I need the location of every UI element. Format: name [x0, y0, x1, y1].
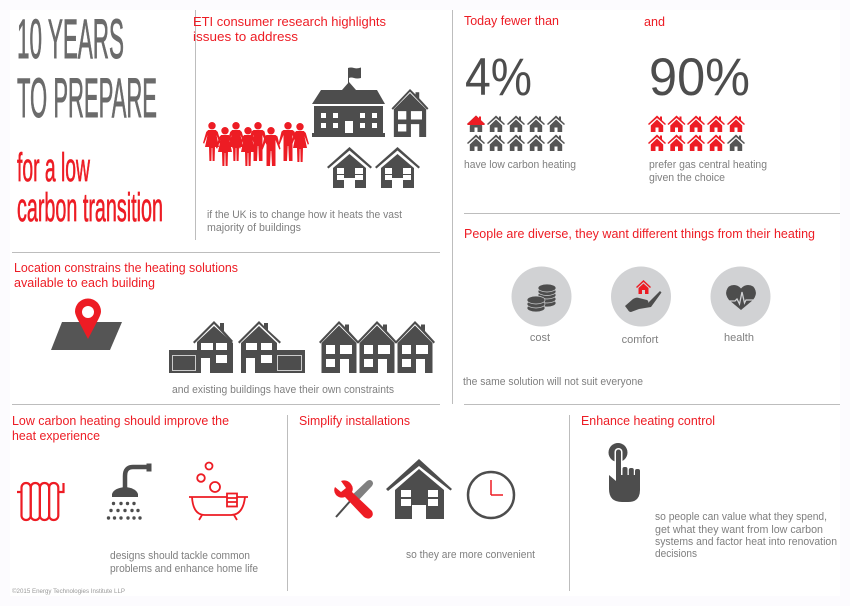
text: buildings note	[207, 209, 402, 234]
heading: enhance heating control: Enhance heating control	[581, 413, 715, 428]
heading: consumer research: ETI consumer research highlights	[193, 14, 386, 29]
text: designs should tackle: problems and enhance home life	[110, 563, 258, 575]
heading: today fewer than: Today fewer than	[464, 13, 559, 28]
heading: and: and	[644, 14, 665, 29]
text: more convenient: so they are more convenient	[406, 549, 535, 561]
text: value what they spend: systems and factor heat into renovation	[655, 536, 837, 548]
text: buildings note: if the UK is to change how it heats the vast	[207, 209, 402, 221]
icon: radiator	[17, 483, 64, 520]
number: 4%: 4%	[465, 48, 532, 107]
text: value what they spend: decisions	[655, 548, 697, 560]
panel: heat experience	[12, 413, 258, 575]
heading: heat experience: Low carbon heating should improve the	[12, 413, 229, 428]
label: cost: cost	[530, 332, 550, 344]
label: comfort: comfort	[622, 334, 658, 346]
icon grid: ten houses one red	[467, 116, 565, 151]
icon: group of people	[203, 122, 309, 166]
panel: simplify installations	[299, 413, 535, 561]
icon grid: ten houses nine red	[648, 116, 745, 151]
heading: heat experience	[12, 413, 229, 443]
icon: pointing hand	[608, 443, 640, 502]
text: low carbon heating: have low carbon heating	[464, 159, 576, 171]
icon: wrench	[334, 480, 373, 519]
title: for a low	[17, 146, 90, 190]
icon: house right	[375, 147, 420, 188]
title	[17, 7, 163, 230]
text: value what they spend: get what they want from low carbon	[655, 524, 823, 536]
icon: clock	[468, 472, 514, 518]
icon: house	[392, 89, 428, 137]
heading: people are diverse: People are diverse, they want different things from their heating	[464, 226, 815, 241]
title: 10 YEARS	[17, 7, 124, 70]
panel: consumer research	[193, 14, 428, 234]
icon: comfort hand with house	[611, 266, 671, 326]
text: value what they spend: so people can value what they spend,	[655, 511, 827, 523]
number: 90%: 90%	[649, 48, 750, 107]
icon: shower	[107, 464, 152, 520]
text: same solution: the same solution will not suit everyone	[463, 376, 643, 388]
icon: house left	[327, 147, 372, 188]
text: designs should tackle	[110, 550, 258, 575]
icon: detached house with left garage	[169, 321, 233, 373]
heading: location constrains: available to each building	[14, 275, 155, 290]
text: designs should tackle: designs should tackle common	[110, 550, 250, 562]
heading: consumer research	[193, 14, 386, 44]
label: health: health	[724, 332, 754, 344]
text: prefer gas central heating	[649, 159, 767, 184]
heading: simplify installations: Simplify installations	[299, 413, 410, 428]
heading: location constrains	[14, 260, 238, 290]
text: prefer gas central heating: given the choice	[649, 172, 725, 184]
icon: school building	[312, 68, 385, 137]
panel: heating control	[581, 413, 837, 560]
heading: heat experience: heat experience	[12, 428, 100, 443]
panel: location constraints	[14, 260, 435, 396]
icon: map pin on plot	[51, 299, 122, 350]
heading: location constrains: Location constrains the heating solutions	[14, 260, 238, 275]
icon: house	[386, 459, 452, 519]
icon: screwdriver	[336, 480, 373, 517]
panel: 4 percent statistic	[464, 13, 576, 171]
panel: people are diverse	[463, 226, 815, 388]
text: carbon transition	[17, 186, 163, 230]
copyright: ©2015 Energy Technologies Institute LLP	[12, 587, 125, 595]
icon: terraced houses	[319, 321, 435, 373]
icon: health heart	[710, 266, 770, 326]
icon: bath with bubbles	[189, 462, 248, 520]
text: TO PREPARE	[17, 66, 157, 129]
heading: consumer research: issues to address	[193, 29, 299, 44]
text: prefer gas central heating: prefer gas central heating	[649, 159, 767, 171]
text: existing buildings: and existing buildings have their own constraints	[172, 384, 394, 396]
text: buildings note: majority of buildings	[207, 222, 301, 234]
icon: detached house with right garage	[238, 321, 305, 373]
panel: 90 percent statistic	[644, 14, 767, 184]
text: value what they spend	[655, 511, 837, 560]
icon: cost coins	[512, 266, 572, 326]
